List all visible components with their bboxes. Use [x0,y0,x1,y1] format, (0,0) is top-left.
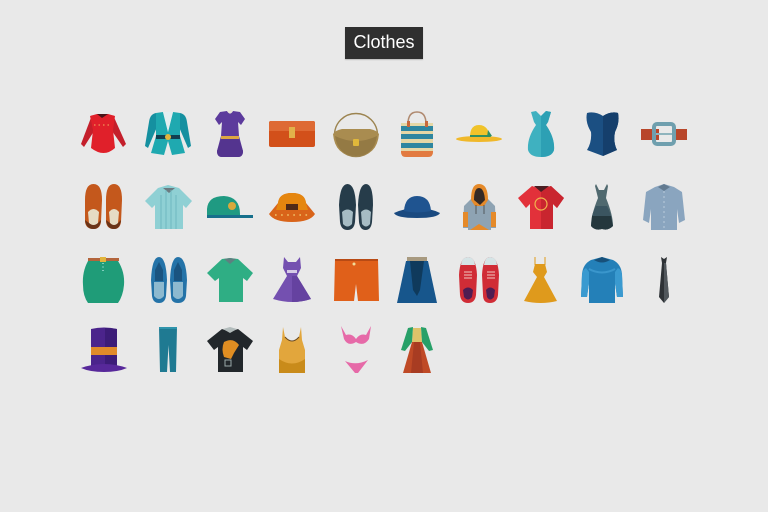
icon: grey orange hoodie [463,184,496,230]
icon: navy skirt [397,257,437,303]
icon: blue sweater [581,257,623,303]
icon: dark gown [591,184,613,230]
icon: grey-blue shirt [643,184,685,230]
icon: striped tote [401,112,433,157]
icon: black graphic tee [207,327,253,372]
icon: blue hat [394,196,440,218]
icon: yellow tank top [279,327,305,373]
icon: orange bucket hat [269,193,315,222]
icon: teal jeans [159,327,177,372]
icon: green cap [207,196,253,218]
icon: dark shoes [339,184,373,230]
icon: red blouse [81,114,126,153]
icon: brown shoes [85,184,122,229]
icon: green jacket and red skirt [401,327,433,373]
icon: red tee [518,186,564,229]
icon: orange case [269,121,315,147]
icon: tan round bag [333,114,379,156]
title [345,27,423,59]
icon: teal gown [528,111,554,157]
icon: pale striped shirt [145,185,192,229]
icon: violet dress [273,257,311,302]
icon: green polo [207,258,253,302]
icon: green skirt [83,257,124,303]
icon: black tie [659,257,669,303]
icon: teal blazer [145,112,191,155]
icon: red sneakers [459,257,499,303]
icon: pink bikini [341,326,371,373]
icon: blue shoes [151,257,187,303]
icon: purple top hat [81,328,127,372]
icon: orange shorts [334,259,379,301]
icon: yellow sun hat [456,125,502,142]
icon: navy corset [586,112,619,156]
icon: yellow dress [524,257,557,303]
icon: red belt [641,124,687,144]
icon: purple dress [215,110,245,157]
title: Clothes [353,32,415,52]
